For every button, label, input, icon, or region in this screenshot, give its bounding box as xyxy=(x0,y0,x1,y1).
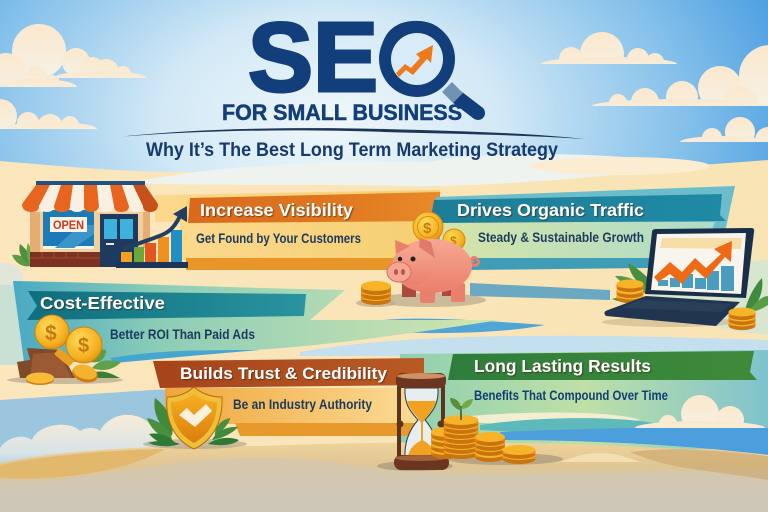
coins above pig: $ xyxy=(423,220,432,237)
heading: cost-effective: Cost-Effective xyxy=(40,293,165,313)
icon: coin stacks and sprout xyxy=(431,398,563,465)
coins above pig xyxy=(413,212,465,251)
title: SEO with magnifier xyxy=(248,2,478,113)
coin stack xyxy=(616,280,644,303)
icon: magnifying glass with arrow xyxy=(379,21,478,113)
plants behind laptop xyxy=(612,263,768,312)
bars xyxy=(658,266,734,291)
plant xyxy=(12,243,32,266)
arrow: growth xyxy=(122,206,187,250)
clouds: bottom xyxy=(0,395,765,468)
panel: drives organic traffic xyxy=(430,186,735,270)
leaves xyxy=(147,398,239,446)
sign: open: OPEN xyxy=(53,218,84,232)
icon: coin stack left of pig xyxy=(356,281,396,307)
sand ground and horizon xyxy=(0,154,768,512)
sprout xyxy=(450,398,473,420)
icon: shield with check xyxy=(143,387,247,449)
icon: money bag and coins xyxy=(7,315,123,385)
icon: hourglass xyxy=(377,373,453,471)
icon: money bag and coins: $ xyxy=(78,335,89,357)
arrow: trend xyxy=(654,241,732,284)
text: industry authority: Be an Industry Authority xyxy=(233,397,372,412)
swoosh under heading xyxy=(118,128,585,139)
panel: builds trust xyxy=(153,358,424,436)
text: better roi: Better ROI Than Paid Ads xyxy=(110,327,255,342)
foreground dunes xyxy=(0,442,768,512)
mid-ground water bands xyxy=(0,260,768,470)
heading: increase visibility: Increase Visibility xyxy=(200,200,353,220)
awning xyxy=(22,181,158,212)
text: benefits compound: Benefits That Compound Over Time xyxy=(474,387,668,403)
heading: builds trust: Builds Trust & Credibility xyxy=(180,364,388,383)
icon: piggy bank xyxy=(374,212,486,307)
clouds: top left xyxy=(0,24,146,140)
heading: drives organic traffic: Drives Organic Traffic xyxy=(457,200,644,220)
text: get found: Get Found by Your Customers xyxy=(196,230,361,246)
subtitle: Why It’s The Best Long Term Marketing Strategy xyxy=(146,140,558,161)
coin stack front xyxy=(728,308,756,330)
icon: storefront with chart xyxy=(12,181,188,268)
leaves xyxy=(90,350,121,378)
bar chart xyxy=(116,230,188,268)
icon: laptop with chart xyxy=(602,228,768,330)
heading: long lasting: Long Lasting Results xyxy=(474,356,651,376)
icon: money bag and coins: $ xyxy=(45,322,57,345)
clouds: top right xyxy=(541,32,768,153)
coins above pig: $ xyxy=(450,234,457,248)
text: steady growth: Steady & Sustainable Growth xyxy=(478,229,644,245)
panel: cost effective xyxy=(13,281,500,363)
heading: for small business: FOR SMALL BUSINESS xyxy=(222,100,462,125)
heading: SEO: SEO xyxy=(248,2,454,112)
panel: long lasting results xyxy=(448,351,757,403)
panel: increase visibility xyxy=(155,190,440,270)
